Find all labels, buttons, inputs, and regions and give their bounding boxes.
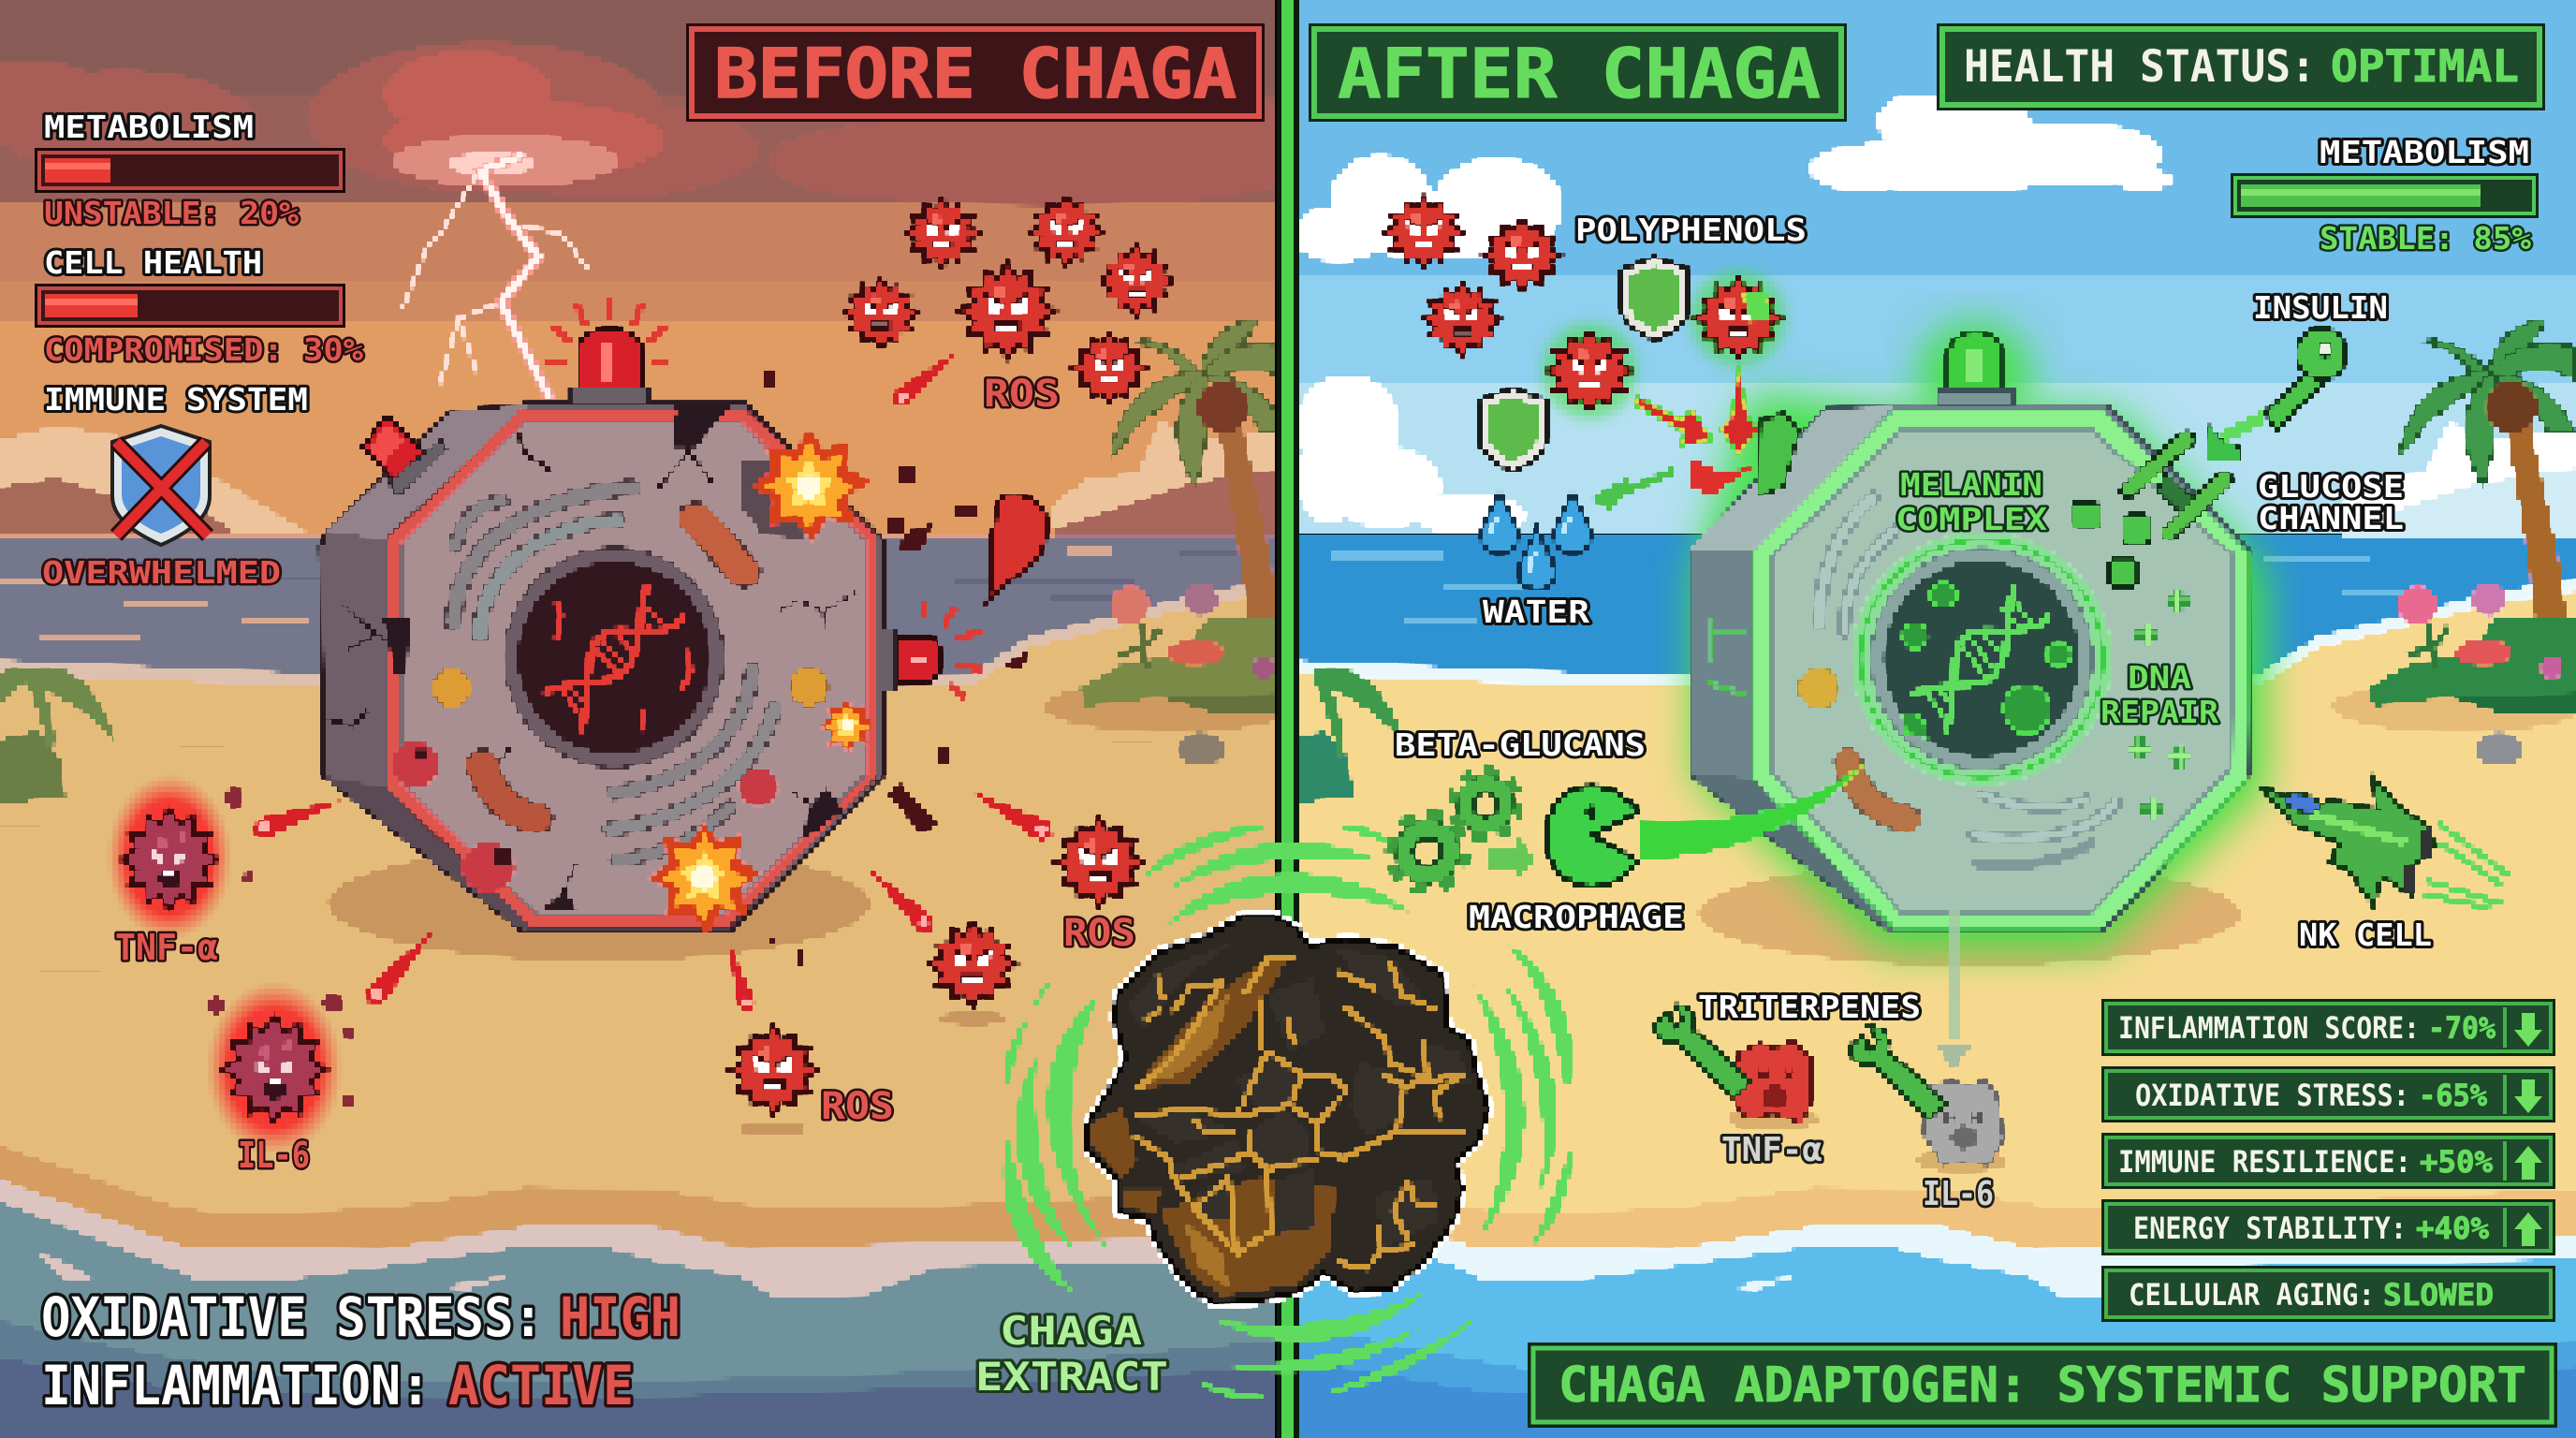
rock: [1177, 732, 1225, 766]
green arrow into channel: [2207, 417, 2263, 461]
tnf-alpha label: TNF-α: [115, 927, 218, 968]
insulin label: INSULIN: [2253, 289, 2388, 326]
cell body: [1691, 404, 2249, 931]
cell: healthy: [1385, 197, 2509, 1172]
glucose channel label: GLUCOSE: [2258, 468, 2404, 505]
golgi membranes: [1819, 498, 2115, 865]
health status panel: [1937, 23, 2545, 110]
metabolism status before: METABOLISM: [44, 109, 254, 145]
ros labels: [821, 373, 1135, 1128]
cell body: [320, 404, 883, 931]
title: before chaga: [686, 23, 1265, 122]
deflecting cell knob: [1692, 414, 1799, 496]
green deflected arrow: [1591, 466, 1676, 510]
cytokine particles: [208, 788, 355, 1108]
chaga mushroom: [1088, 916, 1488, 1303]
cell health status before: CELL HEALTH: [44, 244, 262, 281]
water drops: [1482, 492, 1590, 589]
ros virus: [844, 279, 917, 348]
nk cell jet: [2261, 777, 2509, 908]
ros virus: [1073, 333, 1146, 403]
cell: damaged: [108, 197, 1173, 1154]
palm tree: [2399, 321, 2575, 623]
ros labels: ROS: [821, 1085, 894, 1128]
green cell glow: [1694, 393, 2265, 950]
dna repair label: [2100, 659, 2218, 730]
immune system status before: IMMUNE SYSTEM: [44, 381, 308, 418]
panel: cellular aging: CELLULAR AGING:: [2129, 1277, 2375, 1313]
ros virus: [1100, 246, 1173, 315]
panel: before chaga scene background: [0, 0, 1329, 1438]
title: after chaga: AFTER CHAGA: [1338, 35, 1821, 114]
health status panel: OPTIMAL: [2331, 41, 2519, 93]
health status panel: HEALTH STATUS:: [1964, 41, 2316, 93]
explosion bottom: [649, 823, 761, 933]
red storm clouds: [0, 42, 1329, 206]
il-6 glow and cytokine: [207, 982, 342, 1154]
macrophage label: MACROPHAGE: [1469, 899, 1684, 935]
gray arrow: [1938, 908, 1969, 1069]
nucleus and dna: [505, 548, 724, 768]
bush and flowers: [2367, 582, 2576, 713]
ros shadows: [741, 1012, 1004, 1137]
panel: immune resilience: IMMUNE RESILIENCE:: [2118, 1144, 2411, 1180]
panel: energy stability: [2101, 1199, 2555, 1255]
gray deflated cytokine: [1917, 1081, 2007, 1172]
cracks: [326, 405, 856, 902]
side ports: [1708, 620, 1748, 695]
damaged spots: [391, 741, 779, 892]
distant clouds and mounds: [0, 421, 1279, 536]
ros virus: [1424, 284, 1500, 355]
ros labels: ROS: [984, 373, 1060, 416]
panel: cellular aging: SLOWED: [2383, 1277, 2494, 1313]
chaga warm brown lobes: [1092, 956, 1336, 1296]
bush shadow: [1045, 691, 1275, 734]
panel: inflammation score: -70%: [2428, 1010, 2496, 1046]
gears: [1392, 772, 1517, 888]
chaga extract label: [975, 1308, 1168, 1400]
cell health status before: COMPROMISED: 30%: [44, 331, 363, 368]
small arrow: [1489, 839, 1535, 878]
swirling green energy: [1003, 824, 1572, 1398]
panel: energy stability: +40%: [2416, 1211, 2490, 1246]
panel: cellular aging: [2101, 1266, 2555, 1322]
left edge plant: [1288, 667, 1405, 805]
bush and flowers: [1079, 582, 1279, 713]
bush shadow: [2332, 681, 2576, 733]
icon: broken shield: [112, 426, 210, 545]
bottom status before: HIGH: [560, 1285, 681, 1349]
icon: tilted red alarm: [363, 415, 447, 496]
panel: systemic support banner: [1528, 1343, 2557, 1428]
mitochondria: [695, 518, 744, 572]
ros virus: [1385, 197, 1462, 268]
mitochondrion: [1848, 762, 1907, 819]
glucose channel: [2128, 439, 2224, 533]
ros virus large: [959, 263, 1055, 359]
ros virus: [929, 922, 1016, 1006]
polyphenol shield: [1479, 389, 1546, 471]
melanin granules: [2071, 502, 2150, 587]
tnf-alpha glow and cytokine: [108, 775, 231, 940]
panel: energy stability: ENERGY STABILITY:: [2133, 1211, 2407, 1246]
panel: oxidative stress: [2101, 1066, 2555, 1123]
metabolism status after: [2231, 134, 2539, 257]
metabolism status after: STABLE: 85%: [2320, 220, 2531, 257]
glucose channel label: CHANNEL: [2258, 500, 2404, 536]
panel: systemic support banner: CHAGA ADAPTOGEN: SYSTEMIC SUPPORT: [1559, 1357, 2526, 1414]
chaga group: [1003, 824, 1572, 1398]
panel: immune resilience: +50%: [2420, 1144, 2494, 1180]
melanin complex label: COMPLEX: [1895, 501, 2047, 537]
panel: immune resilience: [2101, 1133, 2555, 1189]
water label: WATER: [1483, 594, 1589, 630]
title: before chaga: BEFORE CHAGA: [714, 35, 1237, 114]
bottom status before: OXIDATIVE STRESS:: [41, 1285, 543, 1349]
tnf label: TNF-α: [1721, 1131, 1822, 1169]
explosion small: [820, 699, 874, 754]
chaga dark plates: [1126, 945, 1470, 1246]
bottom status before: [41, 1285, 681, 1417]
red deflated cytokine: [1728, 1041, 1818, 1130]
panel: oxidative stress: OXIDATIVE STRESS:: [2135, 1078, 2409, 1113]
chaga extract label: EXTRACT: [975, 1354, 1168, 1400]
ros virus being neutralized: [1691, 271, 1785, 365]
wrench: [1656, 1005, 1751, 1097]
cell health status before: [35, 244, 363, 368]
ros virus: [1030, 197, 1103, 266]
chaga extract label: CHAGA: [1000, 1308, 1142, 1354]
icon: green alarm: [1939, 332, 2013, 406]
triterpenes label: TRITERPENES: [1698, 989, 1921, 1025]
ros virus with glow: [1543, 324, 1636, 418]
metabolism status before: [35, 109, 345, 231]
red attack arrows: [1634, 367, 1760, 454]
ros virus: [1484, 219, 1560, 290]
panel: after chaga scene background: [1288, 0, 2576, 1438]
palm tree: [1111, 321, 1287, 623]
polyphenols label: POLYPHENOLS: [1575, 212, 1807, 248]
debris: [763, 370, 1030, 967]
alarm glow: [1919, 323, 2031, 426]
nk cell label: NK CELL: [2299, 917, 2432, 953]
bottom status before: ACTIVE: [448, 1354, 634, 1417]
polyphenol shield: [1621, 257, 1689, 340]
metabolism status before: UNSTABLE: 20%: [44, 195, 299, 231]
chaga golden cracks: [1134, 956, 1466, 1269]
ros virus: [1056, 819, 1142, 905]
left edge plant: [0, 666, 117, 805]
nucleus and dna: [1852, 532, 2112, 785]
metabolism status after: METABOLISM: [2320, 134, 2529, 170]
dna repair label: DNA: [2128, 659, 2191, 696]
panel: oxidative stress: -65%: [2419, 1078, 2488, 1113]
lightning bolt: [402, 154, 590, 399]
immune system status before: [42, 381, 308, 591]
title: after chaga: [1309, 23, 1847, 122]
green beam: [1640, 763, 1865, 859]
ros labels: ROS: [1063, 912, 1135, 955]
glucose channel label: [2258, 468, 2404, 536]
bottom status before: INFLAMMATION:: [41, 1354, 431, 1417]
golgi membranes: [454, 488, 774, 860]
panel: inflammation score: INFLAMMATION SCORE:: [2118, 1010, 2420, 1046]
macrophage eye: [1586, 805, 1597, 820]
white clouds: [1292, 91, 2172, 536]
icon: insulin key: [2265, 329, 2346, 429]
il-6 label: IL-6: [1923, 1175, 1994, 1213]
damaged ros blob: [988, 495, 1046, 599]
comets: [249, 346, 1058, 1014]
melanin complex label: [1895, 466, 2047, 537]
icon: red alarm top: [545, 296, 670, 404]
repair plus icons: [2128, 589, 2191, 820]
dna repair label: REPAIR: [2100, 694, 2218, 730]
wrench: [1851, 1027, 1946, 1119]
centre divider: [1277, 0, 1299, 1438]
il-6 label: IL-6: [238, 1135, 310, 1176]
ros virus: [906, 198, 979, 268]
immune system status before: OVERWHELMED: [42, 554, 281, 591]
macrophage: [1546, 786, 1638, 887]
explosion top: [751, 432, 869, 542]
panel: inflammation score: [2101, 999, 2555, 1056]
rock: [2475, 732, 2524, 766]
ros virus: [730, 1027, 816, 1113]
icon: right red alarm: [882, 599, 981, 697]
melanin complex label: MELANIN: [1900, 466, 2042, 503]
beta-glucans label: BETA-GLUCANS: [1395, 726, 1646, 763]
